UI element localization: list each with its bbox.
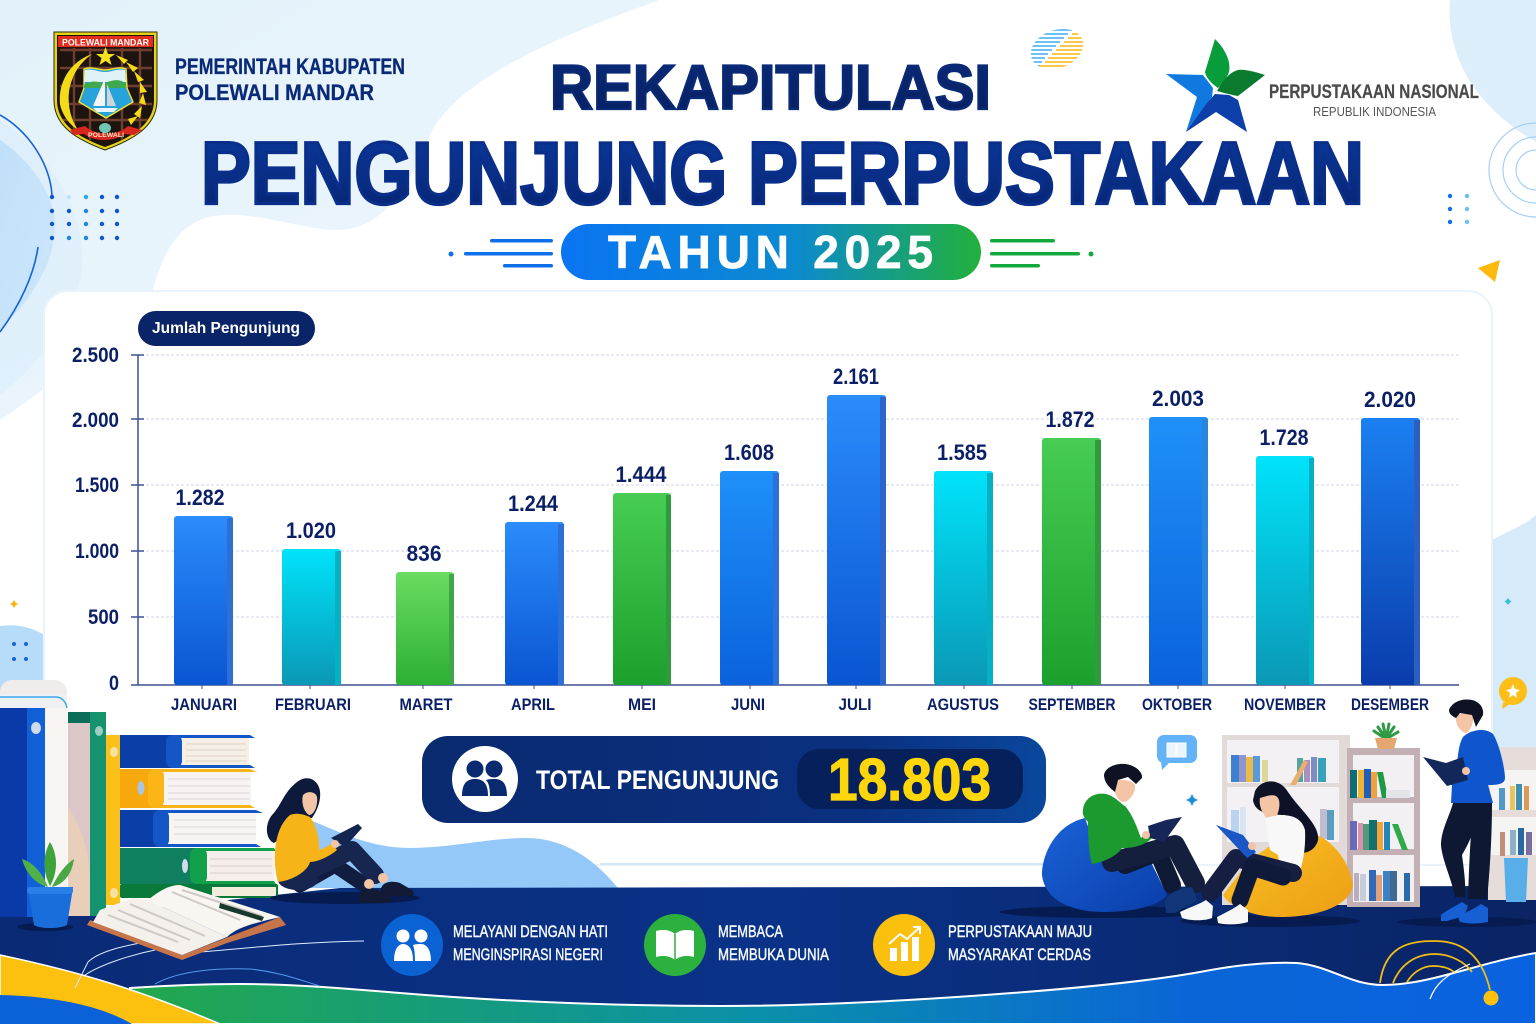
service text: MENGINSPIRASI NEGERI <box>453 945 603 964</box>
bar: Agustus <box>934 440 993 685</box>
icon: star bubble <box>1499 677 1527 709</box>
bar: Juli <box>827 364 886 685</box>
month labels: MEI <box>628 695 656 714</box>
logo wordmark: PERPUSTAKAAN NASIONAL <box>1269 82 1479 103</box>
bar: Juni: 1.608 <box>724 440 774 465</box>
heading: regency name <box>175 54 405 105</box>
bottom waves <box>0 953 1536 1024</box>
floor band <box>0 886 1536 1024</box>
footer message: reading <box>644 914 830 976</box>
wave: yellow <box>0 955 220 1024</box>
panel: chart card <box>44 291 1492 865</box>
axis labels: 1.500 <box>75 474 119 497</box>
reading text: MEMBACA <box>718 922 783 941</box>
bar: Agustus: 1.585 <box>937 440 987 465</box>
bar: Oktober: 2.003 <box>1152 386 1204 411</box>
bar: Februari <box>282 518 341 685</box>
axis labels: 500 <box>88 606 119 629</box>
service text <box>453 922 608 964</box>
logo: Polewali Mandar crest <box>54 32 157 150</box>
shelf 1 <box>1222 735 1350 905</box>
illustration: book stack <box>0 680 278 917</box>
total label: TOTAL PENGUNJUNG <box>536 765 779 795</box>
bar: Mei <box>613 462 671 685</box>
wave: corner blue <box>0 995 132 1024</box>
icon: people white circle <box>452 746 518 812</box>
speed lines left <box>448 239 553 268</box>
axis labels: 0 <box>109 672 119 695</box>
logo: Polewali Mandar crest: POLEWALI <box>88 133 124 139</box>
month labels: FEBRUARI <box>275 695 351 714</box>
shelf 3 <box>1488 747 1536 902</box>
bar: Januari: 1.282 <box>176 485 224 510</box>
month labels: JULI <box>838 695 872 714</box>
footer message: progress <box>873 914 1092 976</box>
bar: Mei: 1.444 <box>616 462 667 487</box>
wave: blue green teal <box>130 953 1536 1024</box>
heading: regency name: POLEWALI MANDAR <box>175 80 374 105</box>
bar: Oktober <box>1149 386 1208 685</box>
axis labels: 1.000 <box>75 540 119 563</box>
progress text <box>948 922 1092 964</box>
title line 2: PENGUNJUNG PERPUSTAKAAN <box>201 124 1364 222</box>
total value: 18.803 <box>828 747 991 813</box>
horizontal book 2 <box>120 769 257 808</box>
horizontal book 3 <box>120 810 263 847</box>
illustration: standing boy <box>1398 699 1536 927</box>
month labels <box>171 695 1429 714</box>
icon: striped oval <box>1030 30 1084 66</box>
bar: November <box>1256 425 1314 685</box>
concentric circles decoration <box>1489 123 1536 217</box>
progress text: PERPUSTAKAAN MAJU <box>948 922 1092 941</box>
icon: blue speech bubble <box>1157 735 1197 770</box>
horizontal book 4 <box>120 848 276 884</box>
illustration: girl on yellow beanbag <box>1180 781 1360 927</box>
decorative arcs bottom right <box>1380 941 1498 1006</box>
card bottom line <box>600 863 1050 865</box>
reading text <box>718 922 830 964</box>
title line 1: REKAPITULASI <box>550 53 991 123</box>
illustration: open book <box>87 885 286 960</box>
icon: potted plant <box>17 842 74 931</box>
month labels: OKTOBER <box>1142 695 1212 714</box>
panel: total visitors <box>422 736 1046 823</box>
small decorative stars <box>10 598 1512 661</box>
bar: Juni <box>720 440 779 685</box>
month labels: NOVEMBER <box>1244 695 1326 714</box>
bar: Februari: 1.020 <box>286 518 336 543</box>
year pill: TAHUN 2025 <box>608 226 933 278</box>
dot grid left <box>50 195 119 240</box>
bar: November: 1.728 <box>1260 425 1308 450</box>
bar: Desember <box>1361 387 1420 685</box>
progress text: MASYARAKAT CERDAS <box>948 945 1091 964</box>
bar: Desember: 2.020 <box>1364 387 1416 412</box>
month labels: DESEMBER <box>1351 695 1429 714</box>
month labels: JUNI <box>731 695 765 714</box>
month labels: SEPTEMBER <box>1028 695 1116 714</box>
bar: Juli: 2.161 <box>833 364 879 389</box>
icon: sparkle <box>1186 794 1198 806</box>
icon: people <box>381 914 443 976</box>
icon: open book <box>644 914 706 976</box>
heading: regency name: PEMERINTAH KABUPATEN <box>175 54 405 79</box>
axis title pill: Jumlah Pengunjung <box>152 320 300 337</box>
banner text: POLEWALI MANDAR <box>62 38 149 48</box>
axis labels <box>72 344 119 695</box>
shelf 2 <box>1347 748 1420 907</box>
bar: Januari <box>174 485 233 685</box>
footer message: service <box>381 914 608 976</box>
speed lines right <box>990 239 1094 268</box>
bar: April <box>505 491 564 685</box>
axis title pill <box>138 311 315 346</box>
month labels: MARET <box>400 695 453 714</box>
illustration: bookshelves <box>1222 724 1536 907</box>
axis labels: 2.000 <box>72 409 119 432</box>
axis labels: 2.500 <box>72 344 119 367</box>
icon: growth chart <box>873 914 935 976</box>
bar: September: 1.872 <box>1046 407 1094 432</box>
light blue wave <box>310 820 618 888</box>
illustration: boy on blue beanbag <box>1000 764 1210 918</box>
chart grid lines <box>146 355 1459 617</box>
bar: Maret <box>396 541 454 685</box>
logo wordmark: REPUBLIK INDONESIA <box>1313 104 1436 119</box>
horizontal book 5 <box>120 884 278 898</box>
month labels: AGUSTUS <box>927 695 999 714</box>
chart axes <box>131 355 1459 689</box>
bar: April: 1.244 <box>508 491 559 516</box>
logo wordmark <box>1269 82 1479 119</box>
icon: yellow triangle <box>1478 260 1500 282</box>
horizontal book 1 <box>120 735 255 768</box>
reading text: MEMBUKA DUNIA <box>718 945 830 964</box>
logo: Perpustakaan Nasional <box>1166 39 1479 132</box>
month labels: JANUARI <box>171 695 237 714</box>
bar: September <box>1042 407 1101 685</box>
illustration: girl reading <box>267 778 420 904</box>
bar chart <box>72 311 1459 714</box>
month labels: APRIL <box>511 695 555 714</box>
shelf plant <box>1374 724 1398 749</box>
decorative lines bottom left <box>75 941 364 988</box>
dot grid right <box>1448 194 1469 224</box>
service text: MELAYANI DENGAN HATI <box>453 922 608 941</box>
bar: Maret: 836 <box>406 541 442 566</box>
